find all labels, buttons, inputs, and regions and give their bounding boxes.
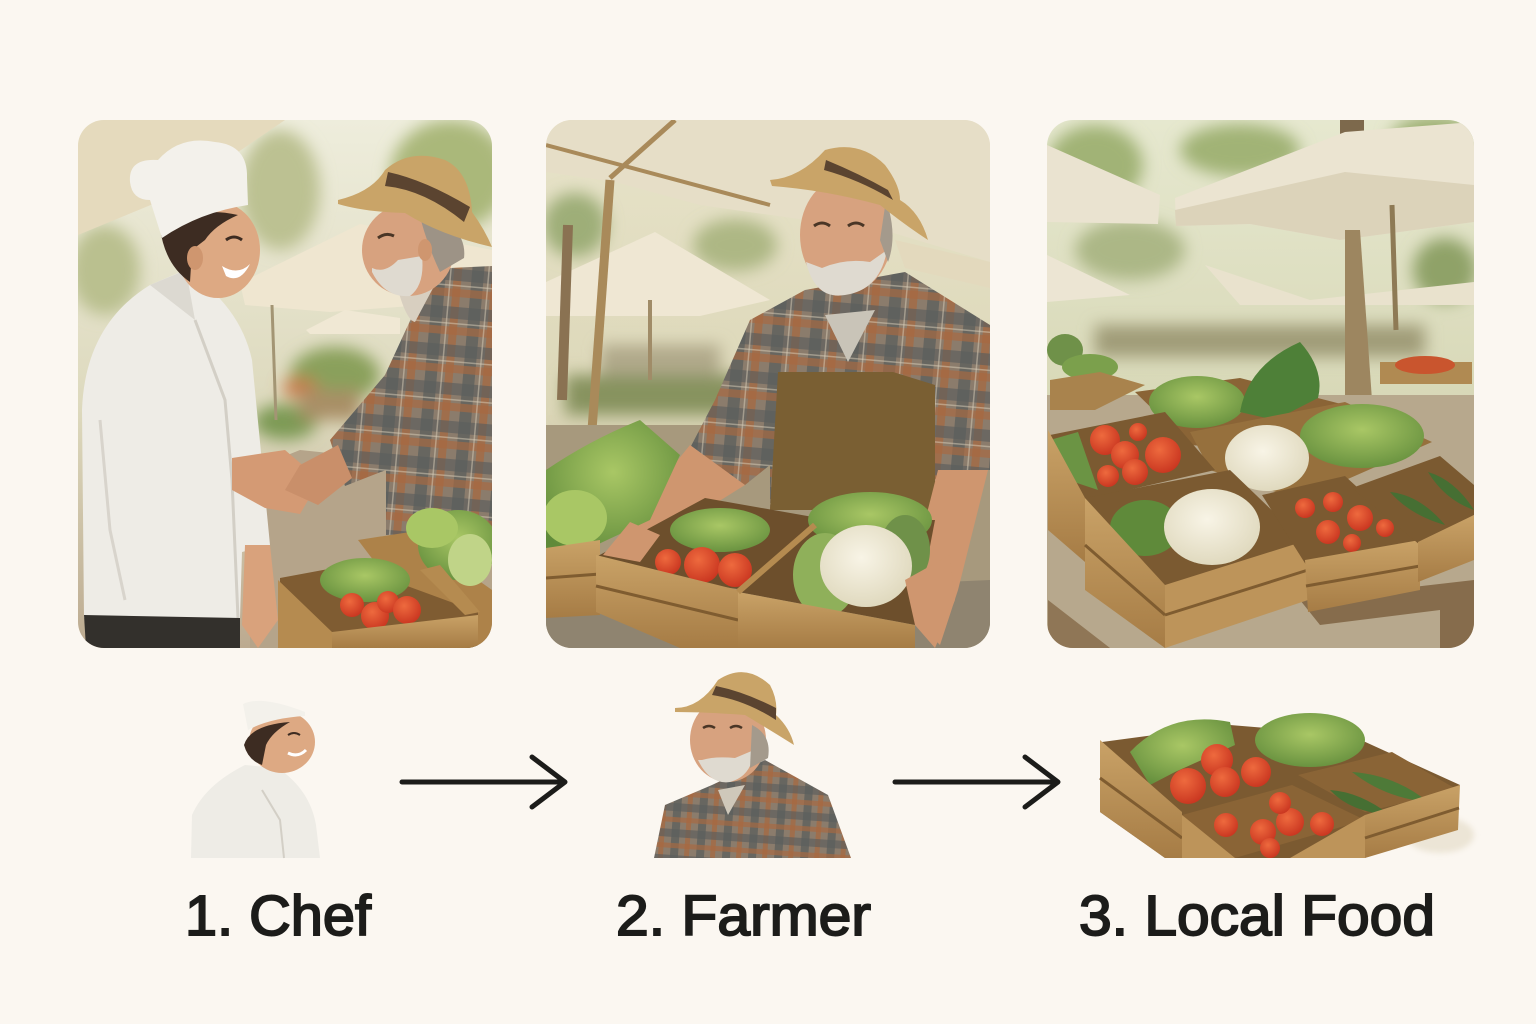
crates with vegetables bbox=[543, 420, 955, 648]
panel: chef and farmer shaking hands bbox=[70, 120, 510, 648]
chef figure bbox=[82, 140, 352, 648]
icon: farmer portrait bbox=[654, 672, 851, 858]
panel: market crates bbox=[1047, 115, 1480, 648]
arrow 2 bbox=[895, 757, 1058, 807]
farmer figure bbox=[625, 147, 990, 645]
grid of crates bbox=[1048, 342, 1474, 648]
arrow 1 bbox=[402, 757, 565, 807]
crate and lettuce behind bbox=[358, 508, 498, 648]
label: 2. Farmer: 2. Farmer bbox=[616, 884, 871, 948]
crate with tomatoes bbox=[278, 558, 480, 648]
panel: farmer with crates bbox=[543, 120, 990, 648]
icon: chef portrait bbox=[191, 701, 320, 858]
icon: crates of vegetables bbox=[1100, 713, 1474, 858]
farmer figure bbox=[330, 156, 492, 535]
label: 3. Local Food: 3. Local Food bbox=[1079, 884, 1435, 948]
label: 1. Chef: 1. Chef bbox=[185, 884, 371, 948]
